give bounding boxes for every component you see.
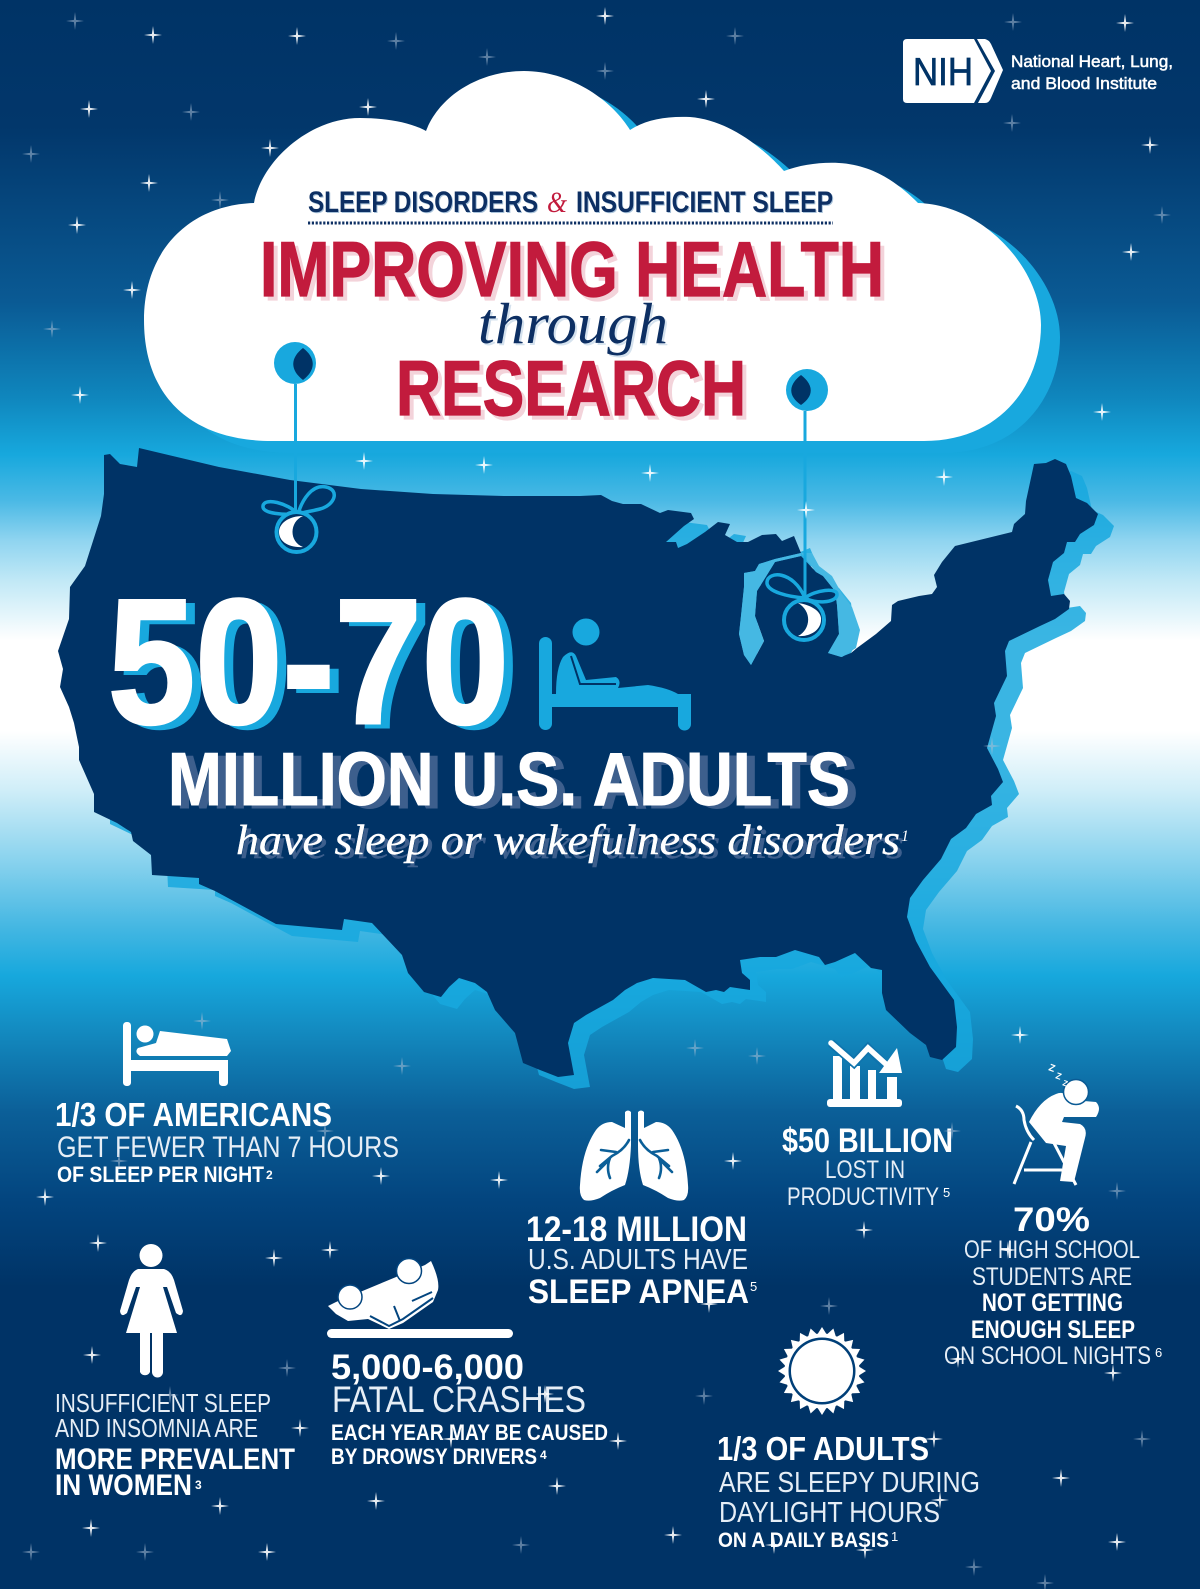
stat: sleepy adults: ARE SLEEPY DURING <box>719 1467 980 1499</box>
cloud <box>144 71 1041 441</box>
logo badge <box>903 39 991 103</box>
stat: fatal crashes <box>327 1258 608 1469</box>
NIH logo: and Blood Institute <box>1011 75 1157 93</box>
institute name: National Heart, Lung, <box>1011 53 1173 71</box>
stat: lost productivity <box>782 1043 953 1211</box>
stat: high school students: 70% <box>1013 1201 1090 1239</box>
icon: student asleep at desk: Z <box>1061 1078 1069 1089</box>
hanging moon left <box>263 342 334 552</box>
moon top <box>274 342 316 384</box>
stat: lost productivity: PRODUCTIVITY <box>787 1183 939 1211</box>
NIH letters: NIH <box>913 51 973 94</box>
bow <box>263 487 334 514</box>
stat: one third of Americans: 1/3 OF AMERICANS <box>55 1096 332 1133</box>
title line 3: RESEARCH <box>396 344 746 432</box>
stat: sleepy adults: ON A DAILY BASIS <box>718 1529 889 1552</box>
logo chevron <box>977 39 1003 103</box>
stat: high school students: STUDENTS ARE <box>972 1263 1132 1291</box>
stat: sleep apnea: 5 <box>750 1279 757 1294</box>
ampersand: & <box>547 186 568 219</box>
stat: insomnia more prevalent in women: INSUFFICIENT SLEEP <box>55 1388 271 1418</box>
stat: one third of Americans: GET FEWER THAN 7 HOURS <box>57 1131 399 1164</box>
stat: sleep apnea: 12-18 MILLION <box>526 1210 747 1249</box>
icon: lungs <box>580 1110 688 1201</box>
bow <box>767 575 837 602</box>
map land <box>58 448 1098 1077</box>
stat: high school students: OF HIGH SCHOOL <box>964 1236 1140 1264</box>
cloud title panel <box>144 71 1060 453</box>
icon: person sitting up in bed <box>539 618 691 731</box>
icon: person in bed <box>123 1022 231 1086</box>
stat: insomnia more prevalent in women <box>55 1244 295 1502</box>
zzz: Z <box>1047 1062 1056 1075</box>
stat: one third of Americans: OF SLEEP PER NIGHT <box>57 1162 264 1187</box>
moon bottom <box>276 512 316 552</box>
stat: insomnia more prevalent in women: IN WOMEN <box>55 1469 192 1502</box>
stat: fatal crashes: 4 <box>540 1448 547 1462</box>
lake michigan <box>739 553 801 665</box>
stat: one third of Americans: 2 <box>266 1168 273 1182</box>
stat: sleepy adults: DAYLIGHT HOURS <box>719 1497 940 1529</box>
stat: sleepy adults: 1 <box>891 1529 898 1544</box>
stat: high school students: 6 <box>1155 1345 1162 1360</box>
million adults: MILLION U.S. ADULTS <box>168 737 850 821</box>
cloud heading <box>260 186 884 432</box>
stat: fatal crashes: EACH YEAR MAY BE CAUSED <box>331 1420 608 1445</box>
map of the United States <box>58 448 1114 1089</box>
map shadow <box>74 460 1114 1089</box>
icon: sun <box>778 1327 866 1415</box>
icon: falling bar chart <box>827 1043 902 1107</box>
stat: lost productivity: 5 <box>943 1185 950 1200</box>
stat: insomnia more prevalent in women: AND INSOMNIA ARE <box>55 1413 258 1443</box>
stat: insomnia more prevalent in women: 3 <box>195 1478 202 1492</box>
NIH logo <box>903 39 1173 103</box>
icon: woman <box>120 1244 183 1378</box>
stat: high school students: ENOUGH SLEEP <box>971 1316 1135 1344</box>
headline statistic <box>108 562 909 864</box>
moon top <box>786 369 828 411</box>
stat: fatal crashes: BY DROWSY DRIVERS <box>331 1444 537 1469</box>
hanging moon right <box>767 369 837 640</box>
stat: high school students <box>944 1062 1162 1370</box>
stat: lost productivity: $50 BILLION <box>782 1122 953 1160</box>
stat: sleep apnea: U.S. ADULTS HAVE <box>528 1244 748 1276</box>
cloud shadow <box>163 83 1060 453</box>
subtitle right: INSUFFICIENT SLEEP <box>576 186 833 219</box>
stat: lost productivity: LOST IN <box>825 1156 905 1184</box>
stat: sleepy adults: 1/3 OF ADULTS <box>717 1430 929 1467</box>
lake huron <box>801 553 860 657</box>
stat: sleep apnea: SLEEP APNEA <box>528 1273 749 1311</box>
footnote 1: 1 <box>901 828 909 845</box>
icon: student asleep at desk <box>1014 1062 1099 1185</box>
50-70 figure: 50-70 <box>108 562 509 761</box>
moon bottom <box>784 600 824 640</box>
stat: fatal crashes: 5,000-6,000 <box>331 1348 524 1387</box>
icon: overturned car <box>327 1258 513 1338</box>
stat: one third of Americans <box>55 1022 399 1187</box>
icon: student asleep at desk: Z <box>1054 1070 1063 1082</box>
stat: sleepy adults <box>717 1327 980 1552</box>
stat: high school students: ON SCHOOL NIGHTS <box>944 1342 1151 1370</box>
stat: fatal crashes: FATAL CRASHES <box>332 1379 586 1420</box>
have sleep or wakefulness disorders: have sleep or wakefulness disorders <box>236 818 900 864</box>
stat: sleep apnea <box>526 1110 757 1311</box>
subtitle left: SLEEP DISORDERS <box>308 186 538 219</box>
title line 2: through <box>478 291 668 356</box>
stat: insomnia more prevalent in women: MORE PREVALENT <box>55 1443 295 1476</box>
stat: high school students: NOT GETTING <box>982 1289 1123 1317</box>
title line 1: IMPROVING HEALTH <box>260 225 884 313</box>
